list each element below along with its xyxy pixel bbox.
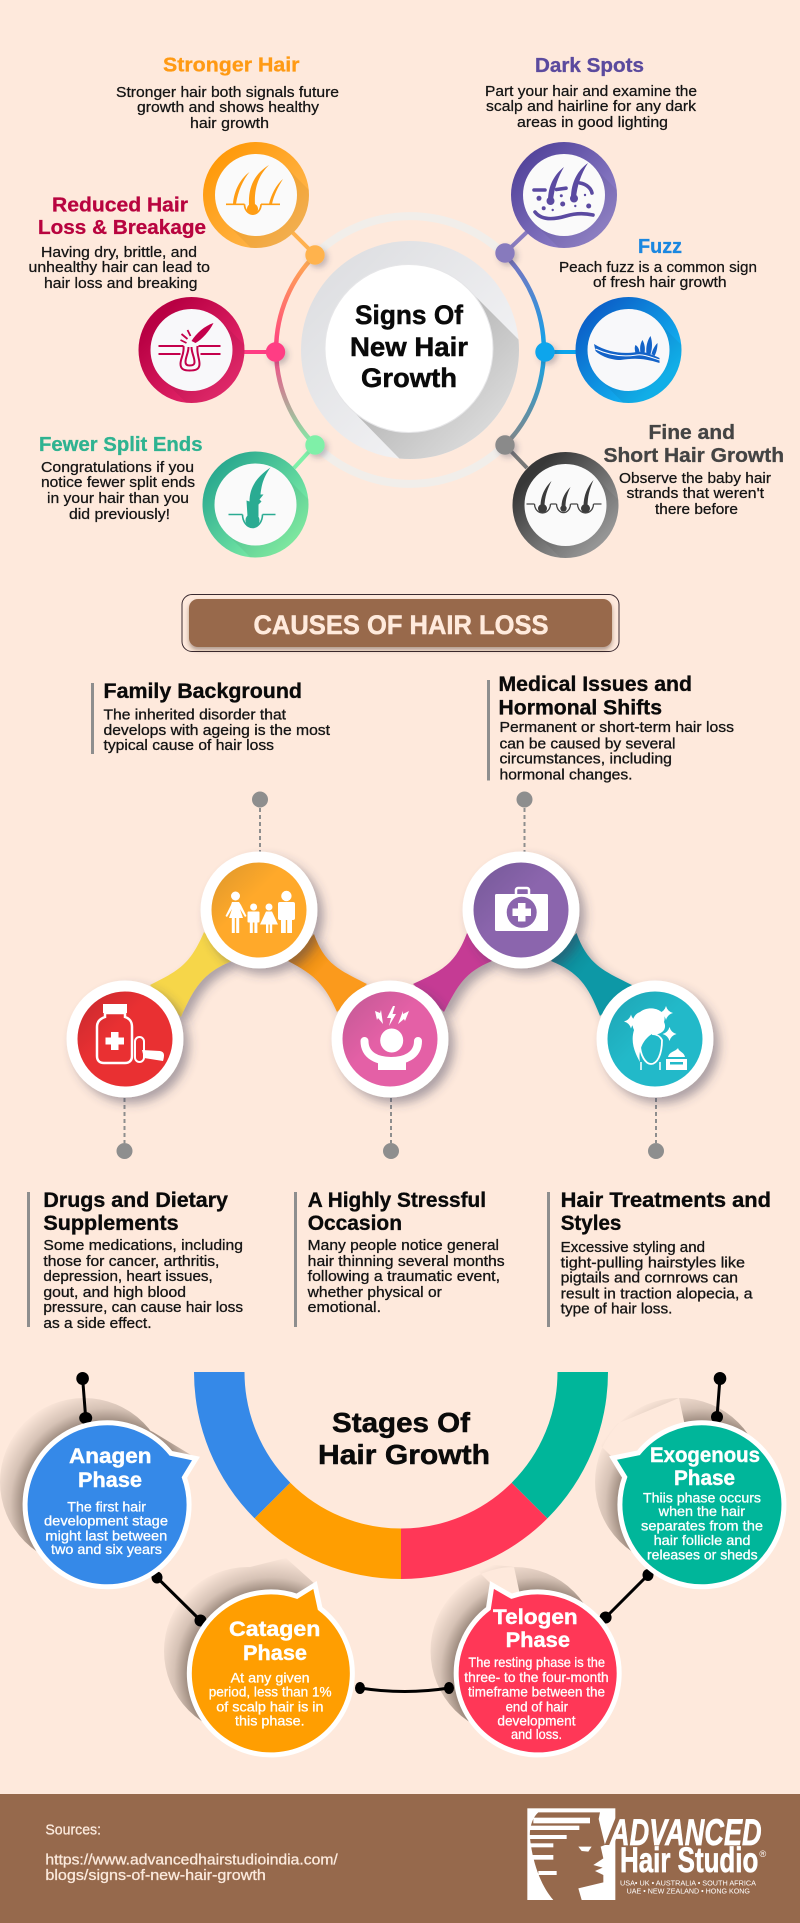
node: a highly stressful occasion xyxy=(332,980,448,1098)
text: fuzz: Peach fuzz is a common sign xyxy=(559,260,757,276)
text: a highly stressful occasion: Occasion xyxy=(308,1212,402,1235)
bubble: exogenous phase xyxy=(613,1423,784,1587)
bubble: catagen phase xyxy=(189,1585,352,1755)
text: fewer split ends: Congratulations if you xyxy=(41,460,194,476)
text: fine and short hair growth: Observe the baby hair xyxy=(619,471,771,487)
text: family background: Family Background xyxy=(104,680,302,703)
icon: fewer split ends xyxy=(202,452,308,558)
bubble: exogenous phase: separates from the xyxy=(641,1518,763,1534)
text: hair treatments and styles: Excessive styling and xyxy=(561,1240,705,1256)
text: reduced hair loss and breakage: Reduced Hair xyxy=(52,194,188,216)
leader lines and dots xyxy=(116,792,664,1159)
bubble: anagen phase xyxy=(25,1423,196,1587)
bubble shadows xyxy=(0,1398,763,1735)
bubble: catagen phase: of scalp hair is in xyxy=(216,1698,324,1714)
bubble: telogen phase: Phase xyxy=(506,1629,570,1652)
center disc: signs of new hair growth: Growth xyxy=(361,363,457,393)
bubble: catagen phase: At any given xyxy=(231,1670,310,1686)
text: dark spots: scalp and hairline for any dark xyxy=(486,99,697,115)
logo: advanced hair studio: UAE • NEW ZEALAND • HONG KONG xyxy=(627,1886,750,1895)
text: fuzz xyxy=(559,236,757,291)
text: dark spots: Part your hair and examine the xyxy=(485,84,697,100)
icon: stronger hair xyxy=(203,142,309,248)
text: medical issues and hormonal shifts xyxy=(487,673,734,784)
heading: causes of hair loss: CAUSES OF HAIR LOSS xyxy=(254,610,548,640)
text: dark spots: Dark Spots xyxy=(535,55,644,77)
bubble: catagen phase: Catagen xyxy=(229,1618,320,1641)
bubble: exogenous phase: hair follicle and xyxy=(654,1532,750,1548)
bubble: catagen phase: this phase. xyxy=(235,1712,305,1728)
text: fuzz: of fresh hair growth xyxy=(593,275,726,291)
text: fewer split ends: did previously! xyxy=(69,507,170,523)
text: stronger hair: Stronger Hair xyxy=(163,54,300,76)
text: fine and short hair growth: strands that weren't xyxy=(626,486,764,502)
bubble: telogen phase: three- to the four-month xyxy=(464,1669,609,1685)
bubble: anagen phase: Anagen xyxy=(69,1445,152,1468)
text: drugs and dietary supplements: Supplements xyxy=(43,1212,179,1235)
text: drugs and dietary supplements: pressure, can cause hair loss xyxy=(43,1300,243,1316)
bubble: catagen phase: period, less than 1% xyxy=(209,1684,332,1700)
center disc: signs of new hair growth: Signs Of xyxy=(355,300,464,330)
section: signs of new hair growth xyxy=(28,54,784,595)
sources text: Sources: xyxy=(45,1822,101,1838)
text: drugs and dietary supplements: as a side effect. xyxy=(43,1316,152,1332)
text: hair treatments and styles: result in traction alopecia, a xyxy=(561,1286,754,1302)
text: fine and short hair growth: Short Hair Growth xyxy=(604,445,784,467)
footer band xyxy=(0,1794,800,1923)
icon: dark spots xyxy=(511,142,617,248)
text: a highly stressful occasion: Many people notice general xyxy=(308,1238,499,1254)
text: fine and short hair growth xyxy=(604,422,784,518)
bubble: anagen phase: development stage xyxy=(44,1512,168,1528)
title: stages of hair growth: Stages Of xyxy=(332,1407,471,1438)
text: dark spots: areas in good lighting xyxy=(517,115,668,131)
connector stubs and ring dots xyxy=(244,232,576,468)
icon: fuzz xyxy=(576,297,682,403)
sources text xyxy=(45,1822,339,1884)
bubble: anagen phase: Phase xyxy=(78,1469,142,1492)
bubble: anagen phase: The first hair xyxy=(67,1498,146,1514)
text: fuzz: Fuzz xyxy=(638,236,682,258)
text: medical issues and hormonal shifts: Medical Issues and xyxy=(498,673,692,696)
center disc: signs of new hair growth: New Hair xyxy=(350,332,468,362)
text: stronger hair: growth and shows healthy xyxy=(137,100,320,116)
bubble: telogen phase: timeframe between the xyxy=(468,1684,605,1700)
bubble: telogen phase: development xyxy=(497,1712,576,1728)
text: dark spots xyxy=(485,55,697,131)
icon: fine and short hair xyxy=(512,452,618,558)
text: hair treatments and styles: type of hair loss. xyxy=(561,1302,672,1318)
sources text: https://www.advancedhairstudioindia.com/ xyxy=(45,1852,339,1868)
text: stronger hair: Stronger hair both signals future xyxy=(116,85,339,101)
icon: reduced hair loss xyxy=(138,297,244,403)
text: reduced hair loss and breakage: Loss & Breakage xyxy=(38,217,206,239)
text: a highly stressful occasion: following a traumatic event, xyxy=(308,1269,500,1285)
text: drugs and dietary supplements: depression, heart issues, xyxy=(43,1269,213,1285)
text: a highly stressful occasion: A Highly Stressful xyxy=(308,1189,486,1212)
bubble: telogen phase: end of hair xyxy=(506,1698,568,1714)
bubble: anagen phase: might last between xyxy=(45,1528,167,1544)
text: reduced hair loss and breakage: Having dry, brittle, and xyxy=(41,245,197,261)
logo: advanced hair studio xyxy=(527,1808,766,1900)
bubble: telogen phase xyxy=(456,1585,619,1755)
text: medical issues and hormonal shifts: hormonal changes. xyxy=(500,768,632,784)
text: hair treatments and styles: Styles xyxy=(561,1212,621,1235)
text: hair treatments and styles xyxy=(547,1189,771,1327)
text: stronger hair xyxy=(116,54,339,132)
text: hair treatments and styles: Hair Treatments and xyxy=(561,1189,771,1212)
text: fine and short hair growth: Fine and xyxy=(648,422,735,444)
text: reduced hair loss and breakage: unhealthy hair can lead to xyxy=(28,260,210,276)
heading: causes of hair loss xyxy=(182,594,619,652)
sources text: blogs/signs-of-new-hair-growth xyxy=(45,1867,266,1884)
text: fewer split ends: Fewer Split Ends xyxy=(39,434,202,456)
node: medical issues and hormonal shifts xyxy=(462,852,580,968)
text: medical issues and hormonal shifts: can be caused by several xyxy=(500,736,676,752)
text: a highly stressful occasion: emotional. xyxy=(308,1300,381,1316)
bubble: exogenous phase: Thiis phase occurs xyxy=(643,1490,761,1506)
bubble: anagen phase: two and six years xyxy=(51,1541,162,1557)
section: stages of hair growth xyxy=(0,1372,784,1755)
text: family background: The inherited disorder that xyxy=(104,708,286,724)
text: drugs and dietary supplements: Drugs and Dietary xyxy=(43,1189,228,1212)
logo: advanced hair studio: ® xyxy=(759,1849,766,1859)
semicircle chart xyxy=(194,1372,608,1579)
center disc: signs of new hair growth xyxy=(301,241,519,459)
node: hair treatments and styles xyxy=(596,980,714,1098)
bubble: catagen phase: Phase xyxy=(243,1642,307,1665)
bubble: exogenous phase: releases or sheds xyxy=(647,1546,758,1562)
text: medical issues and hormonal shifts: Permanent or short-term hair loss xyxy=(500,720,734,736)
connector ribbons xyxy=(150,932,632,1017)
logo: advanced hair studio: USA• UK • AUSTRALIA • SOUTH AFRICA xyxy=(620,1878,756,1887)
text: a highly stressful occasion: hair thinning several months xyxy=(308,1254,505,1270)
text: drugs and dietary supplements: Some medications, including xyxy=(43,1238,243,1254)
bubble: exogenous phase: when the hair xyxy=(658,1503,745,1519)
text: a highly stressful occasion: whether physical or xyxy=(307,1285,442,1301)
title: stages of hair growth: Hair Growth xyxy=(318,1439,490,1470)
bubble: telogen phase: and loss. xyxy=(511,1726,562,1742)
bubble: telogen phase: Telogen xyxy=(493,1606,578,1629)
section: causes chain xyxy=(66,792,714,1159)
text: drugs and dietary supplements: those for cancer, arthritis, xyxy=(43,1254,219,1270)
text: hair treatments and styles: pigtails and cornrows can xyxy=(561,1270,738,1286)
text: family background: develops with ageing is the most xyxy=(104,723,330,739)
text: fewer split ends xyxy=(39,434,202,523)
bubble: telogen phase: The resting phase is the xyxy=(468,1654,605,1670)
text: family background xyxy=(91,680,330,754)
text: fine and short hair growth: there before xyxy=(655,502,738,518)
text: hair treatments and styles: tight-pulling hairstyles like xyxy=(561,1256,745,1272)
text: drugs and dietary supplements xyxy=(27,1189,243,1332)
bubble: exogenous phase: Phase xyxy=(674,1467,735,1490)
text: family background: typical cause of hair loss xyxy=(104,738,274,754)
node: drugs and dietary supplements xyxy=(66,980,184,1098)
text: reduced hair loss and breakage xyxy=(28,194,210,292)
text: reduced hair loss and breakage: hair loss and breaking xyxy=(44,276,197,292)
text: stronger hair: hair growth xyxy=(190,116,269,132)
text: medical issues and hormonal shifts: circumstances, including xyxy=(500,752,672,768)
title: stages of hair growth xyxy=(318,1407,490,1470)
text: a highly stressful occasion xyxy=(294,1189,505,1327)
bubble: exogenous phase: Exogenous xyxy=(650,1444,760,1467)
text: medical issues and hormonal shifts: Hormonal Shifts xyxy=(498,696,662,720)
text: drugs and dietary supplements: gout, and high blood xyxy=(43,1285,186,1301)
text: fewer split ends: notice fewer split ends xyxy=(41,475,195,491)
text: fewer split ends: in your hair than you xyxy=(47,491,189,507)
central ring xyxy=(276,216,544,484)
black connectors xyxy=(76,1372,726,1694)
node: family background xyxy=(200,852,318,968)
